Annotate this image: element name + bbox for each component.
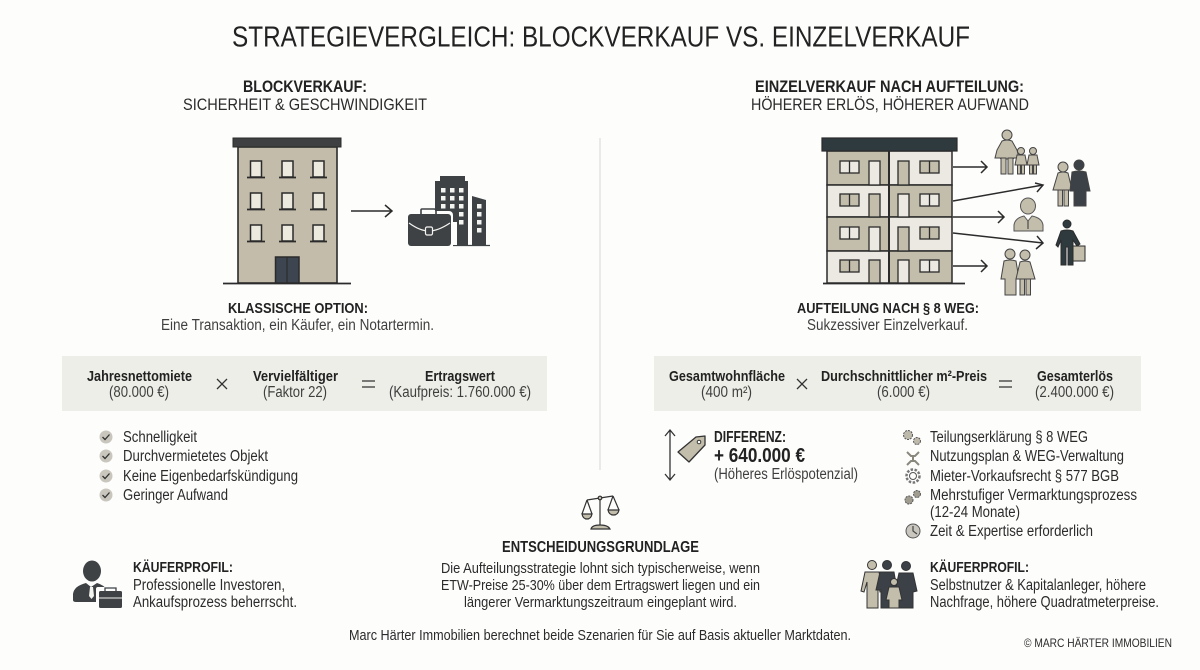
icon: divided apartment building: [822, 138, 965, 284]
icon: process gears: [905, 490, 920, 504]
heading: Blockverkauf: [183, 78, 427, 114]
heading: Einzelverkauf: HÖHERER ERLÖS, HÖHERER AUFWAND: [751, 96, 1029, 114]
heading: Einzelverkauf: [751, 78, 1029, 114]
icon: gears: [904, 430, 920, 444]
arrows: units to buyers: [953, 161, 1043, 272]
icon: mother with two children: [995, 130, 1039, 174]
icon: floor plan: [907, 452, 919, 465]
text: Entscheidungsgrundlage: ENTSCHEIDUNGSGRUNDLAGE: [502, 539, 699, 556]
list text: Teilungserklärung § 8 WEG: [930, 429, 1088, 446]
heading: Einzelverkauf: EINZELVERKAUF NACH AUFTEILUNG:: [755, 78, 1024, 96]
checklist: Blockverkauf advantages: [100, 429, 298, 504]
text: Entscheidungsgrundlage: [441, 539, 760, 611]
panel: formula Ertragswert: Jahresnettomiete: [87, 368, 192, 385]
icon: scales: [582, 496, 619, 529]
list text: Mehrstufiger Vermarktungsprozess: [930, 487, 1137, 504]
text: Entscheidungsgrundlage: ETW-Preise 25-30% über dem Ertragswert liegen und ein: [441, 577, 760, 594]
text: Entscheidungsgrundlage: Die Aufteilungsstrategie lohnt sich typischerweise, wenn: [441, 560, 760, 577]
icon: cog: [906, 470, 920, 482]
text: klassische Option: [161, 300, 434, 334]
checklist: Blockverkauf advantages: Durchvermietetes Objekt: [123, 448, 269, 465]
text: Aufteilung nach § 8 WEG: [797, 300, 979, 334]
icon: price tag: [678, 436, 705, 462]
icon: clock: [906, 524, 920, 538]
title: STRATEGIEVERGLEICH: BLOCKVERKAUF VS. EINZELVERKAUF: [232, 22, 970, 54]
copyright: © MARC HÄRTER IMMOBILIEN: [1024, 636, 1172, 650]
text: Aufteilung nach § 8 WEG: AUFTEILUNG NACH § 8 WEG:: [797, 300, 979, 317]
text: Käuferprofil right: [930, 559, 1159, 611]
icon: office towers and briefcase: [405, 176, 490, 248]
icon: couple: [1053, 160, 1090, 206]
callout: Differenz: + 640.000 €: [714, 445, 805, 467]
callout: Differenz: [714, 429, 858, 483]
panel: formula Ertragswert: (Faktor 22): [263, 384, 327, 401]
panel: formula Ertragswert: (Kaufpreis: 1.760.000 €): [389, 384, 531, 401]
panel: formula Ertragswert: Vervielfältiger: [253, 368, 338, 385]
icon: buyer with shopping bag: [1056, 220, 1085, 265]
icon: up-down arrow: [665, 430, 675, 480]
icon: older couple: [1001, 249, 1035, 295]
checklist: Blockverkauf advantages: Keine Eigenbedarfskündigung: [123, 468, 298, 485]
list text: Nutzungsplan & WEG-Verwaltung: [930, 448, 1124, 465]
list text: Mieter-Vorkaufsrecht § 577 BGB: [930, 468, 1119, 485]
panel: formula Gesamterlös: Durchschnittlicher m²-Preis: [821, 368, 987, 385]
callout: Differenz: (Höheres Erlöspotenzial): [714, 466, 858, 483]
text: klassische Option: Eine Transaktion, ein Käufer, ein Notartermin.: [161, 317, 434, 334]
text: Käuferprofil left: Professionelle Investoren,: [133, 577, 285, 594]
icon: investor with briefcase: [73, 560, 124, 610]
text: Käuferprofil right: KÄUFERPROFIL:: [930, 559, 1029, 576]
checklist: Blockverkauf advantages: Schnelligkeit: [123, 429, 198, 446]
list text: (12-24 Monate): [930, 504, 1020, 521]
panel: formula Gesamterlös: [654, 356, 1141, 411]
footer note: Marc Härter Immobilien berechnet beide Szenarien für Sie auf Basis aktueller Marktdaten.: [349, 627, 851, 644]
checklist: Blockverkauf advantages: Geringer Aufwand: [123, 487, 228, 504]
text: Käuferprofil right: Selbstnutzer & Kapitalanleger, höhere: [930, 577, 1146, 594]
heading: Blockverkauf: BLOCKVERKAUF:: [243, 78, 367, 96]
panel: formula Gesamterlös: Gesamterlös: [1037, 368, 1113, 385]
list text: [930, 429, 1137, 540]
list text: Zeit & Expertise erforderlich: [930, 523, 1093, 540]
checklist: Einzelverkauf effort: [904, 429, 1137, 540]
icon: business person: [1014, 198, 1043, 231]
text: Entscheidungsgrundlage: längerer Vermarktungszeitraum eingeplant wird.: [464, 594, 737, 611]
panel: formula Gesamterlös: Gesamtwohnfläche: [669, 368, 785, 385]
panel: formula Ertragswert: Ertragswert: [425, 368, 495, 385]
arrow: building to investor: [351, 205, 392, 217]
text: klassische Option: KLASSISCHE OPTION:: [228, 300, 368, 317]
text: Käuferprofil left: Ankaufsprozess beherrscht.: [133, 594, 297, 611]
text: Käuferprofil right: Nachfrage, höhere Quadratmeterpreise.: [930, 594, 1159, 611]
panel: formula Ertragswert: (80.000 €): [109, 384, 169, 401]
callout: Differenz: DIFFERENZ:: [714, 429, 786, 446]
icon: family: [861, 560, 917, 608]
text: Aufteilung nach § 8 WEG: Sukzessiver Einzelverkauf.: [807, 317, 968, 334]
panel: formula Gesamterlös: (2.400.000 €): [1035, 384, 1114, 401]
heading: Blockverkauf: SICHERHEIT & GESCHWINDIGKEIT: [183, 96, 427, 114]
panel: formula Gesamterlös: (400 m²): [701, 384, 752, 401]
text: Käuferprofil left: KÄUFERPROFIL:: [133, 559, 233, 576]
icon: apartment building: [223, 138, 351, 284]
panel: formula Ertragswert: [62, 356, 547, 411]
text: Käuferprofil left: [133, 559, 297, 611]
panel: formula Gesamterlös: (6.000 €): [877, 384, 930, 401]
